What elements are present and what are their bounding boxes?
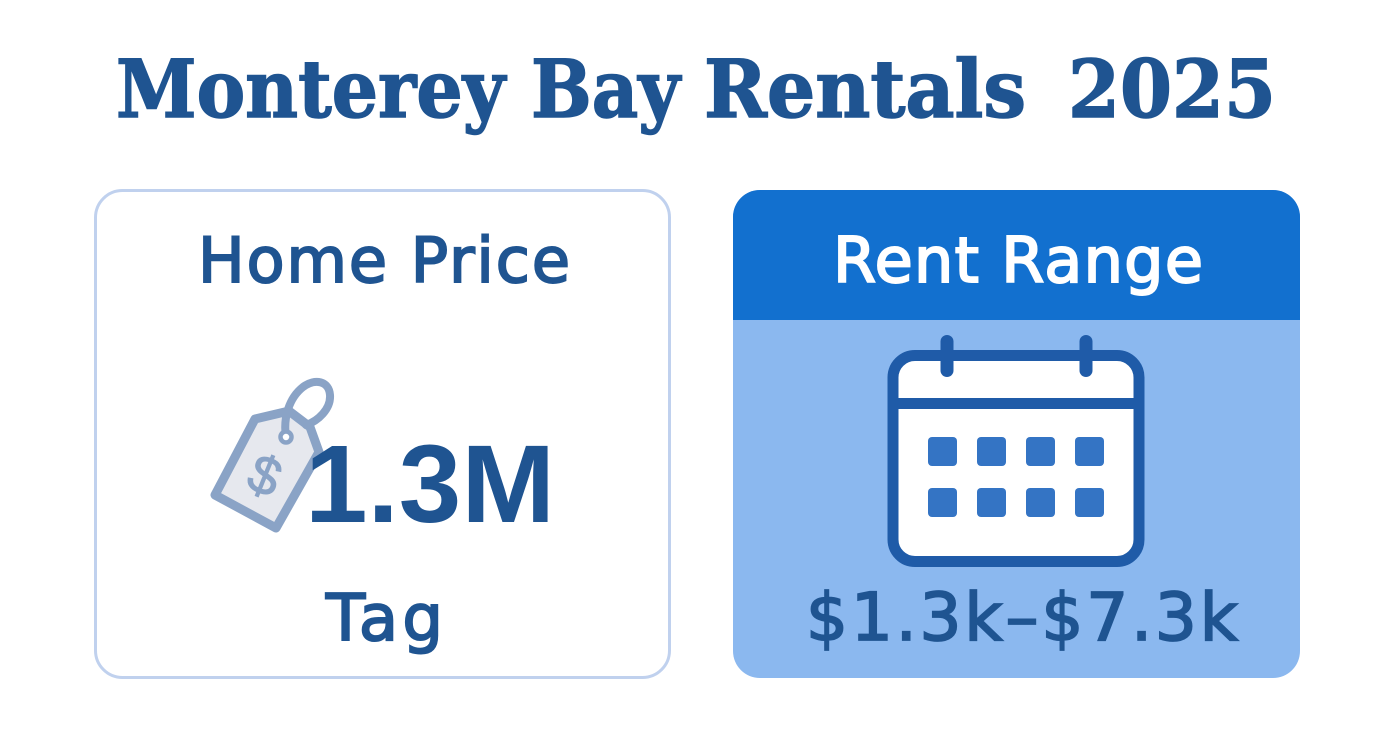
icon: price tag: $ (239, 442, 290, 509)
title: Monterey (116, 42, 507, 136)
panel body (733, 190, 1300, 678)
title: Rentals (704, 42, 1026, 136)
panel: rent range (733, 190, 1300, 678)
title: Bay (531, 42, 682, 136)
title (116, 42, 1276, 136)
title: 2025 (1068, 42, 1276, 136)
panel header band (733, 190, 1300, 320)
rent range value: $1.3k–$7.3k (806, 579, 1239, 656)
label: tag: Tag (325, 582, 443, 656)
heading: home price: Home Price (198, 224, 570, 297)
big number: 1.3M: 1.3M (305, 423, 555, 546)
icon: calendar (892, 335, 1140, 562)
panel: home price (96, 190, 670, 678)
heading: rent range: Rent Range (833, 224, 1203, 297)
icon: price tag (215, 382, 330, 528)
card outline (96, 190, 670, 678)
